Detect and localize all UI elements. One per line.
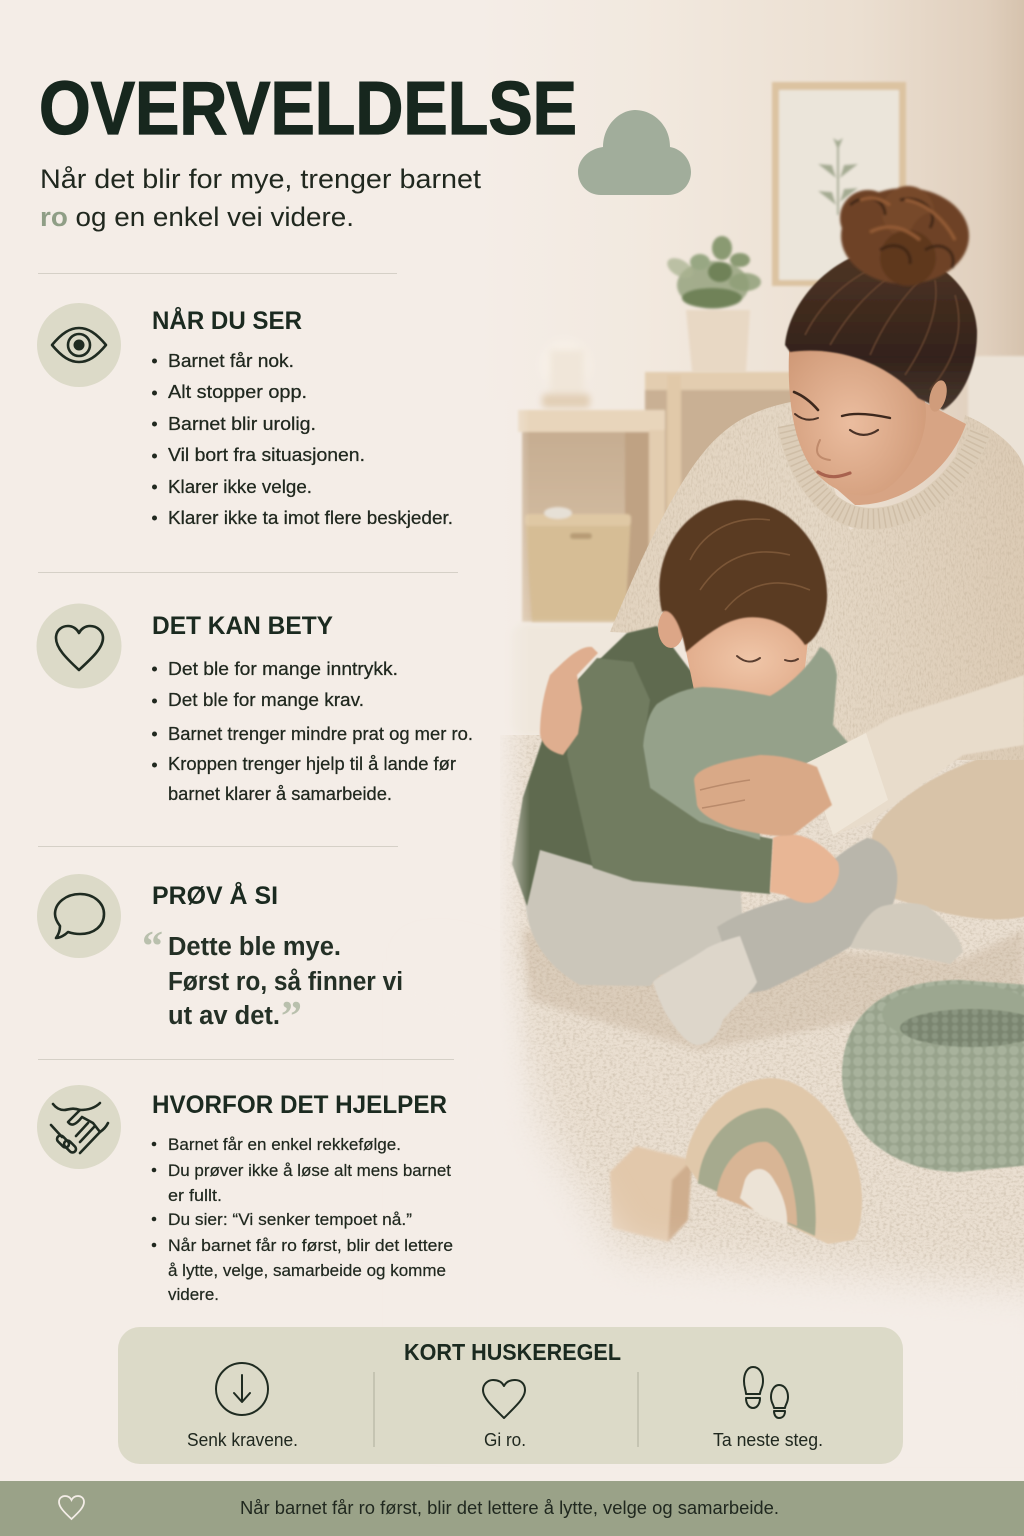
child's sweater back (512, 626, 705, 906)
bullet list: når du ser: Vil bort fra situasjonen. (168, 444, 365, 465)
quote: Dette ble mye. (168, 933, 341, 961)
quote: ” (281, 994, 302, 1040)
sweater knit texture (600, 400, 1024, 770)
mother's trousers (871, 745, 1024, 920)
icon: footer heart (59, 1496, 84, 1519)
cloud icon (578, 110, 691, 195)
child's closed eyes (737, 656, 798, 662)
title: OVERVELDELSE (39, 65, 577, 150)
front sock (653, 936, 757, 1045)
quote: Først ro, så finner vi (168, 968, 403, 996)
child's trousers (525, 833, 897, 995)
subtitle: Når det blir for mye, trenger barnet (40, 164, 482, 194)
collar ribbing (788, 425, 980, 519)
quote (142, 924, 403, 1040)
heading: hvorfor det hjelper: HVORFOR DET HJELPER (152, 1091, 447, 1119)
hair strands (805, 262, 959, 390)
quote: ut av det. (168, 1002, 280, 1030)
photo fade to background (430, 400, 1024, 1420)
bullet list: når du ser (152, 350, 453, 528)
quote: “ (142, 924, 163, 970)
bullet list: det kan bety: Det ble for mange inntrykk. (168, 658, 398, 679)
child's sweater arm (567, 658, 773, 894)
panel heading: KORT HUSKEREGEL (404, 1339, 621, 1365)
mother's hand on pillow (694, 755, 832, 836)
panel: kort huskeregel (118, 1327, 903, 1464)
mother's hair (785, 250, 977, 410)
section: når du ser (37, 303, 453, 528)
bullet list: hvorfor det hjelper: Når barnet får ro først, blir det lettere (168, 1236, 453, 1255)
bullet list: det kan bety (152, 658, 473, 804)
rug texture (500, 735, 1024, 1335)
mother's sweater (610, 400, 1024, 760)
heading: når du ser: NÅR DU SER (152, 306, 302, 335)
bullet list: når du ser: Barnet blir urolig. (168, 413, 316, 434)
mother's hand on shoulder (540, 647, 598, 755)
bullet list: hvorfor det hjelper: å lytte, velge, samarbeide og komme (168, 1261, 446, 1280)
mother's neck (815, 400, 966, 505)
right sock (850, 903, 963, 964)
section: det kan bety (36, 604, 473, 804)
wicker basket on shelf (525, 507, 631, 622)
heading: prøv å si: PRØV Å SI (152, 881, 278, 910)
bullet list: når du ser: Klarer ikke ta imot flere beskjeder. (168, 507, 453, 528)
heading: det kan bety: DET KAN BETY (152, 612, 333, 640)
wall (480, 0, 1024, 760)
icon: speech bubble (37, 874, 121, 958)
bullet list: når du ser: Barnet får nok. (168, 350, 294, 371)
bullet list: når du ser: Alt stopper opp. (168, 381, 307, 402)
footer band (0, 1481, 1024, 1536)
potted plant (664, 236, 761, 372)
label: senk kravene: Senk kravene. (187, 1430, 298, 1450)
pillow (643, 647, 850, 840)
mother's face (789, 334, 926, 496)
photo: mother comforting child (503, 0, 1024, 1303)
bullet list: hvorfor det hjelper: Du prøver ikke å løse alt mens barnet (168, 1161, 451, 1180)
bullet list: hvorfor det hjelper: Barnet får en enkel rekkefølge. (168, 1135, 401, 1154)
sweater collar (788, 425, 980, 519)
bullet list: hvorfor det hjelper: Du sier: “Vi senker tempoet nå.” (168, 1210, 412, 1229)
label: ta neste steg: Ta neste steg. (713, 1430, 823, 1450)
label: gi ro: Gi ro. (484, 1430, 526, 1450)
sweater cuff (807, 733, 888, 835)
bullet list: det kan bety: Det ble for mange krav. (168, 689, 364, 710)
wooden shelves (518, 372, 795, 622)
child's hair strands (690, 519, 810, 610)
bullet list: det kan bety: Barnet trenger mindre prat og mer ro. (168, 723, 473, 744)
bullet list: det kan bety: barnet klarer å samarbeide. (168, 783, 392, 804)
bullet list: hvorfor det hjelper (152, 1135, 453, 1304)
child's ear (658, 608, 684, 648)
icon: heart (483, 1380, 525, 1418)
footer text: Når barnet får ro først, blir det lettere å lytte, velge og samarbeide. (240, 1498, 779, 1518)
sofa (968, 356, 1024, 466)
bullet list: hvorfor det hjelper: videre. (168, 1285, 219, 1304)
bullet list: når du ser: Klarer ikke velge. (168, 476, 312, 497)
icon: footsteps (744, 1367, 788, 1418)
floor and cushion (510, 624, 680, 736)
icon: down arrow in circle (216, 1363, 268, 1415)
subtitle (40, 164, 482, 232)
child's hand (770, 834, 839, 903)
child's face (680, 611, 808, 700)
icon: eye (37, 303, 121, 387)
mother's facial features (794, 392, 890, 477)
section: hvorfor det hjelper (37, 1085, 453, 1304)
bullet list: hvorfor det hjelper: er fullt. (168, 1186, 222, 1205)
bullet list: det kan bety: Kroppen trenger hjelp til å lande før (168, 753, 456, 774)
wooden block (610, 1146, 692, 1242)
framed plant picture (772, 82, 906, 286)
mother's ear (926, 378, 950, 414)
knitted basket (842, 980, 1024, 1172)
icon: handshake (37, 1085, 121, 1169)
mother's hair bun (840, 186, 969, 286)
icon: heart (36, 604, 122, 688)
subtitle: ro og en enkel vei videre. (40, 202, 354, 232)
candle (535, 335, 595, 408)
mother's sleeve (808, 675, 1024, 835)
wooden rainbow (685, 1078, 862, 1244)
section: prøv å si (37, 874, 403, 1040)
child's hair (659, 500, 827, 652)
